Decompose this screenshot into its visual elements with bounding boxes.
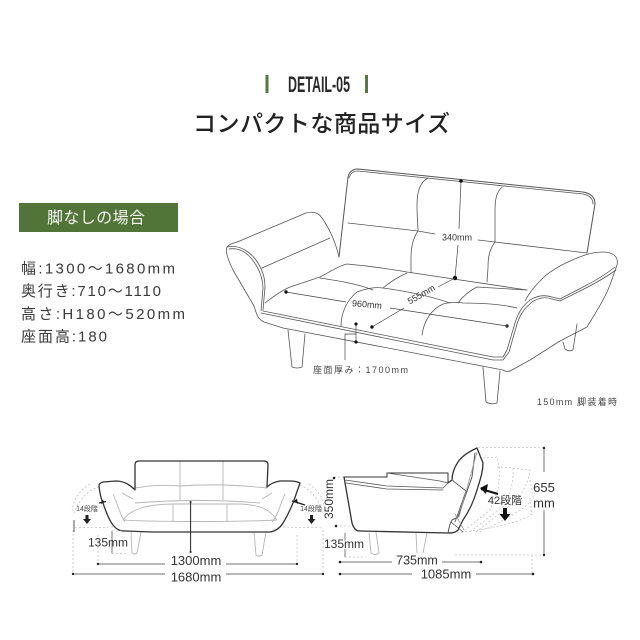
front view arrows and step labels: 14段階 xyxy=(76,504,98,513)
dimension 555mm xyxy=(370,278,455,329)
dimension seat thickness xyxy=(313,322,408,375)
dimension 340mm: 340mm xyxy=(442,232,472,242)
section label: DETAIL-05 xyxy=(266,72,368,97)
dimension 655mm xyxy=(533,447,555,556)
dimension 735mm: 735mm xyxy=(396,554,438,568)
dimension 1300mm: 1300mm xyxy=(171,553,221,568)
front view arrows and step labels xyxy=(74,498,322,532)
side view recline dashes xyxy=(335,448,544,574)
dimension seat thickness: 座面厚み：1700mm xyxy=(313,365,408,375)
dimension 960mm xyxy=(284,290,509,328)
front view sofa drawing xyxy=(72,461,325,584)
dimension 340mm xyxy=(442,179,472,280)
front view inner seams xyxy=(113,461,285,522)
text block: size specifications: 幅:1300～1680mm xyxy=(21,260,175,278)
side view legs xyxy=(369,532,427,554)
front view recline arcs xyxy=(72,484,325,572)
dimension 135mm side: 135mm xyxy=(324,537,364,551)
sofa legs xyxy=(288,324,577,404)
side view piping xyxy=(345,452,477,532)
dimension 1085mm: 1085mm xyxy=(421,566,471,582)
sofa left arm xyxy=(226,212,617,372)
dimension 350mm: 350mm xyxy=(322,479,336,519)
front view arrows and step labels: 14段階 xyxy=(300,504,322,513)
dimension 960mm: 960mm xyxy=(352,298,382,311)
dimension 555mm: 555mm xyxy=(406,283,437,306)
side view step arrows and label xyxy=(480,484,522,521)
text block: size specifications: 座面高:180 xyxy=(21,328,107,346)
dimension 1680mm: 1680mm xyxy=(171,570,221,584)
dimension 135mm front: 135mm xyxy=(88,536,128,550)
title: コンパクトな商品サイズ xyxy=(193,110,450,136)
dimension center height line xyxy=(190,501,192,553)
main sofa line drawing xyxy=(226,169,617,404)
front view outline xyxy=(99,461,300,532)
section label: DETAIL-05: DETAIL-05 xyxy=(288,72,350,97)
side view sofa drawing xyxy=(322,447,555,582)
side view step arrows and label: 42段階 xyxy=(488,493,522,507)
dimension 655mm: 655 xyxy=(533,480,555,495)
panel: green heading without legs: 脚なしの場合 xyxy=(47,209,145,227)
dimension 655mm: mm xyxy=(533,496,555,510)
note: with 150mm legs: 150mm 脚装着時 xyxy=(537,396,617,407)
sofa backrest xyxy=(339,169,595,282)
text block: size specifications: 高さ:H180～520mm xyxy=(21,306,185,323)
side view body outline xyxy=(344,448,483,533)
dimension 135mm front xyxy=(88,531,128,554)
panel: green heading without legs xyxy=(19,203,178,232)
dimension 135mm side xyxy=(324,533,366,557)
sofa seat and piping xyxy=(261,264,616,360)
text block: size specifications: 奥行き:710～1110 xyxy=(21,283,161,300)
front view legs xyxy=(131,532,266,556)
text block: size specifications xyxy=(21,260,185,346)
